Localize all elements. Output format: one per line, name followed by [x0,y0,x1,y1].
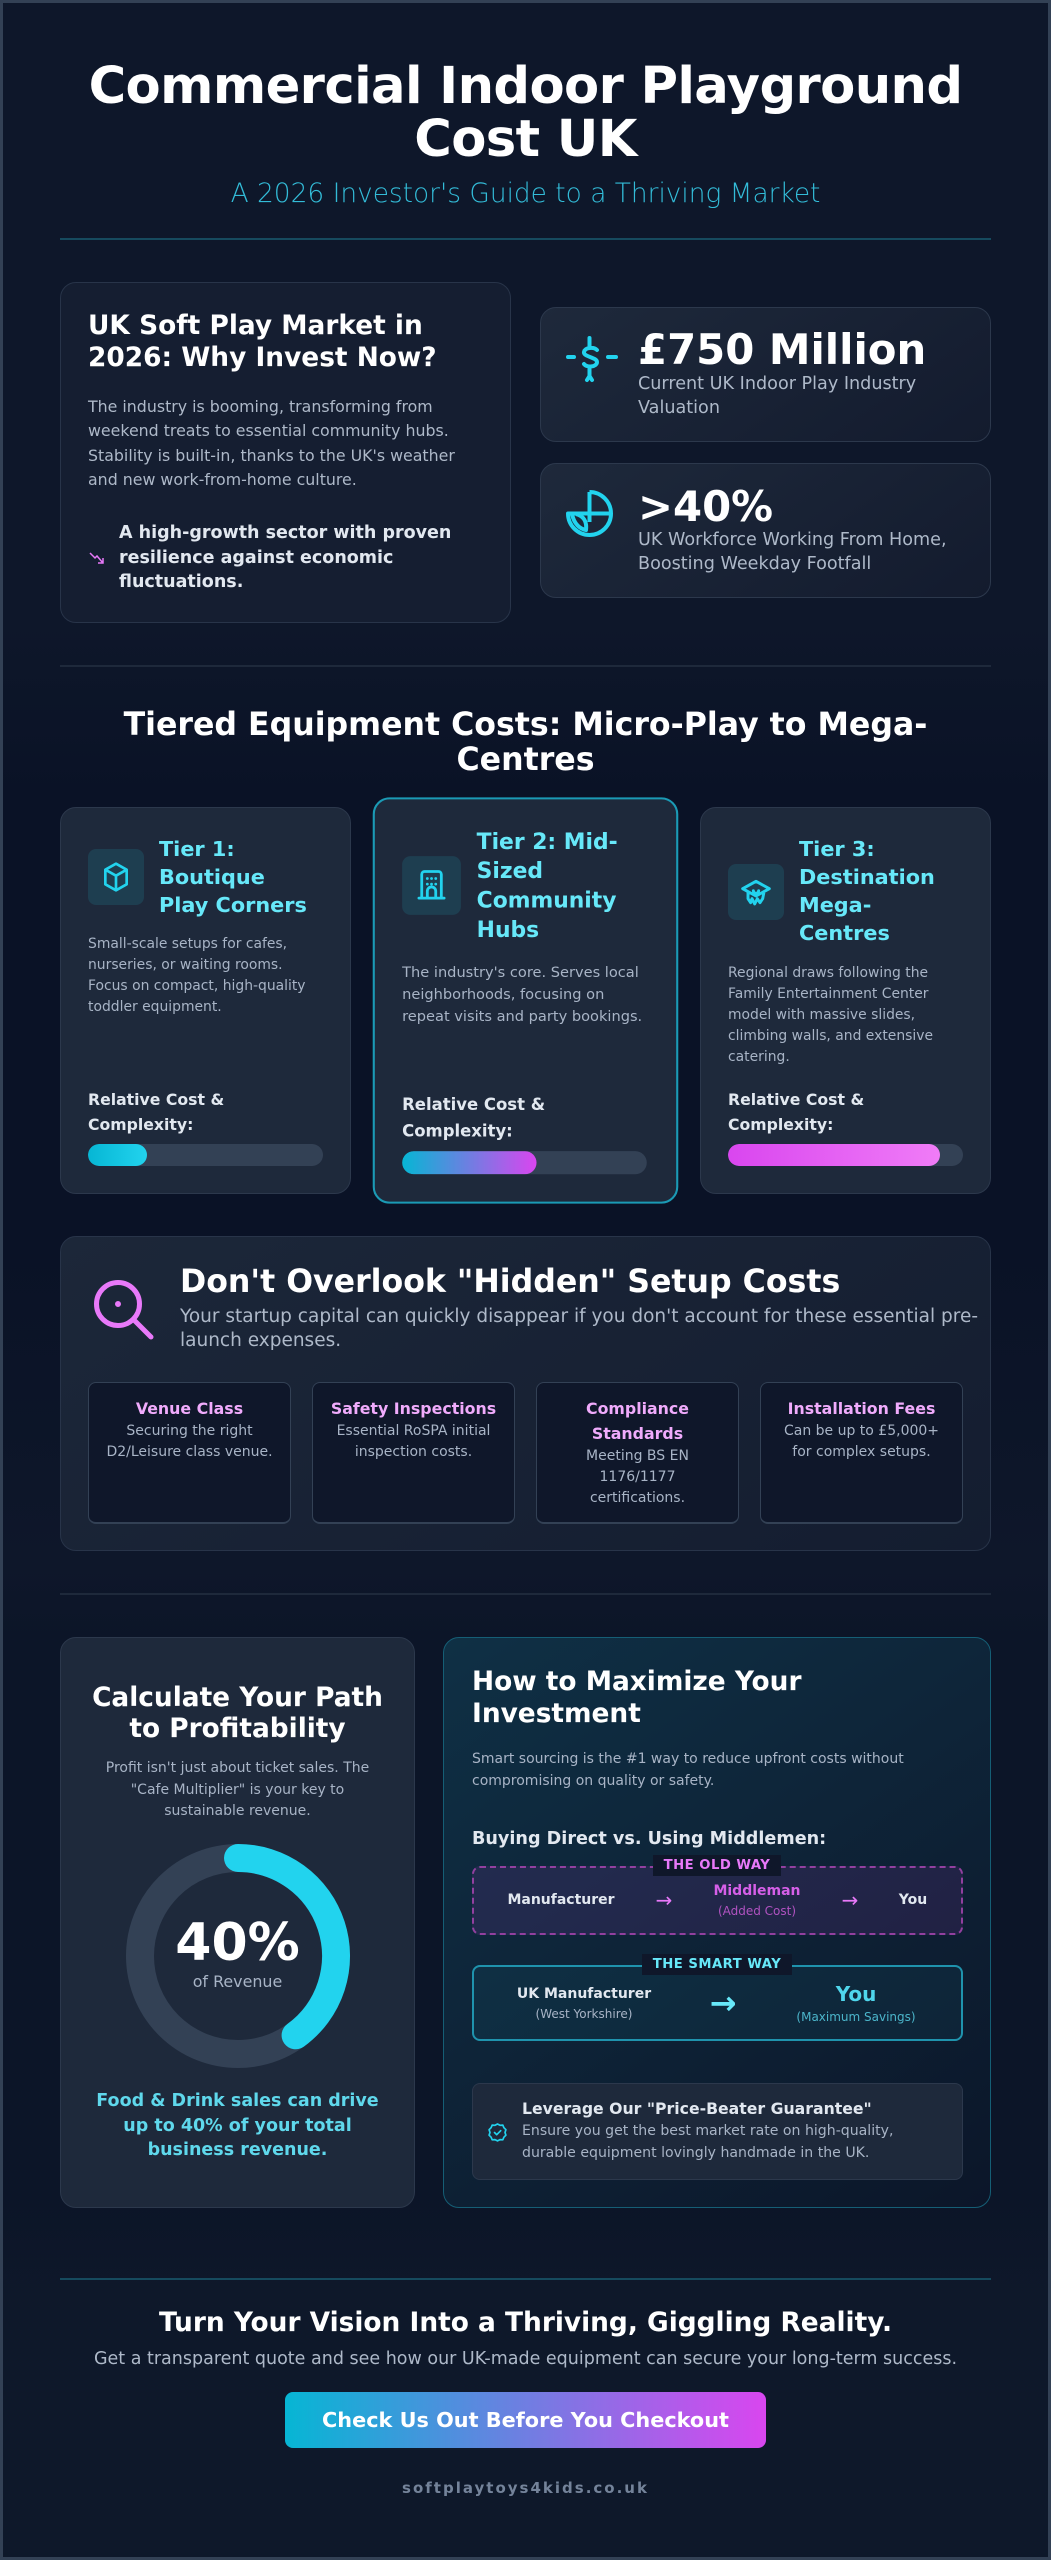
tier description: climbing walls, and extensive [728,1028,933,1044]
icon: check badge [488,2123,507,2142]
card text: D2/Leisure class venue. [106,1444,273,1460]
title: Commercial Indoor Playground [89,56,962,116]
text: market description: weekend treats to essential community hubs. [88,421,449,440]
text: smart sourcing: Smart sourcing is the #1 way to reduce upfront costs without [472,1751,904,1767]
card: venue class [88,1382,291,1524]
text: smart sourcing [472,1751,904,1788]
heading: maximize: How to Maximize Your [472,1666,801,1697]
text: cafe multiplier: Profit isn't just about ticket sales. The [106,1760,369,1776]
heading: profitability: to Profitability [129,1713,346,1744]
tier title: Community [477,888,616,913]
smart way label: THE SMART WAY [653,1957,781,1972]
stat label: valuation: Current UK Indoor Play Industry [638,374,916,394]
heading: tiered equipment costs: Tiered Equipment Costs: Micro-Play to Mega- [124,707,927,743]
icon: magnifier [94,1280,154,1340]
diagram: old way [472,1866,963,1935]
callout: food and drink: business revenue. [148,2140,327,2160]
tier title: Centres [799,921,890,945]
text: cafe multiplier: sustainable revenue. [164,1803,311,1819]
tier description [402,964,642,1025]
icon: box [88,849,144,905]
icon: dollar sign [566,336,618,382]
tier title: Hubs [477,917,539,942]
tier title [159,837,307,917]
tier title: Tier 1: [159,837,235,861]
arrow: → [656,1888,672,1912]
tier description [88,936,306,1015]
panel: hidden setup costs [60,1236,991,1551]
text: market description: Stability is built-in, thanks to the UK's weather [88,446,455,465]
footer heading: Turn Your Vision Into a Thriving, Giggling Reality. [159,2307,892,2338]
text: intro: launch expenses. [180,1330,341,1351]
node: you: You [899,1892,927,1908]
heading: maximize: Investment [472,1698,641,1729]
button [285,2392,766,2448]
card text [784,1423,939,1460]
cost label [728,1090,864,1134]
heading: profitability: Calculate Your Path [92,1682,383,1713]
cost bar [402,1151,647,1174]
card title: Venue Class [136,1399,243,1418]
card title: Installation Fees [788,1399,935,1418]
card text: Can be up to £5,000+ [784,1423,939,1439]
node: manufacturer: Manufacturer [507,1892,615,1908]
card text: for complex setups. [792,1444,931,1460]
tier description: The industry's core. Serves local [402,964,639,981]
tier title: Destination [799,865,935,889]
stat label: workforce: Boosting Weekday Footfall [638,554,871,574]
cost bar [728,1144,963,1166]
node: uk manufacturer: UK Manufacturer [517,1986,651,2002]
tier description: Family Entertainment Center [728,986,929,1002]
footer call to action [60,2278,991,2497]
card text [106,1423,273,1460]
heading: tiered equipment costs [124,707,927,778]
cost label: Relative Cost & [728,1090,864,1109]
cost bar [88,1144,323,1166]
arrow: → [842,1888,858,1912]
callout: high-growth sector: fluctuations. [119,572,243,592]
tier title: Play Corners [159,893,307,917]
card text [586,1448,689,1506]
panel: tier 3 [700,807,991,1194]
chart: 40 percent donut [126,1844,350,2068]
icon: graduation cap [728,864,784,920]
donut value: 40% [175,1913,300,1973]
heading: why invest now: 2026: Why Invest Now? [88,342,437,373]
old way label: THE OLD WAY [664,1858,770,1873]
cost label [402,1094,545,1140]
website: softplaytoys4kids.co.uk [402,2479,649,2497]
tier description: catering. [728,1049,790,1065]
text: market description: and new work-from-home culture. [88,470,357,489]
node: you: You [836,1982,876,2006]
panel: market overview [60,282,511,623]
tier description: neighborhoods, focusing on [402,986,604,1003]
callout: food and drink: Food & Drink sales can drive [96,2091,379,2111]
cost label [88,1090,224,1134]
title: Cost UK [414,109,637,169]
icon: pie and leaf [566,490,613,537]
stat label: valuation: Valuation [638,398,720,418]
heading: maximize [472,1666,802,1729]
arrow: → [710,1984,736,2022]
panel: work from home stat [540,463,991,598]
heading: profitability [92,1682,383,1744]
old way label [653,1855,781,1876]
cost label: Complexity: [88,1114,193,1134]
card: safety inspections [312,1382,515,1524]
card title: Safety Inspections [331,1399,496,1418]
card text [337,1423,490,1460]
card text: Securing the right [126,1423,253,1439]
tier title: Mega- [799,893,871,917]
tier description: toddler equipment. [88,999,222,1015]
panel: path to profitability [60,1637,415,2208]
button: Check Us Out Before You Checkout [322,2408,729,2432]
tier title [476,829,618,942]
panel: tier 2 [373,797,678,1204]
stat: 750 million: £750 Million [638,325,926,374]
stat: over 40 percent: >40% [638,482,773,531]
manufacturer note: (West Yorkshire) [536,2007,632,2021]
tier title: Sized [477,858,543,883]
cost label: Complexity: [402,1120,513,1140]
tier title: Tier 3: [799,837,875,861]
tier description: repeat visits and party bookings. [402,1008,642,1025]
savings note: (Maximum Savings) [796,2010,916,2024]
guarantee title: Leverage Our "Price-Beater Guarantee" [522,2099,872,2118]
stat label: valuation [638,374,916,418]
cost label: Relative Cost & [402,1094,545,1114]
callout: food and drink [96,2091,379,2160]
cost label: Complexity: [728,1114,833,1134]
card title: Compliance [586,1399,689,1418]
tier description: Focus on compact, high-quality [88,978,306,994]
tier title: Boutique [159,865,265,889]
card text: 1176/1177 [600,1469,675,1485]
smart way label [642,1954,792,1975]
panel: maximize investment [443,1637,991,2208]
callout: high-growth sector: A high-growth sector with proven [119,523,451,543]
node: middleman: Middleman [713,1883,801,1899]
guarantee text: durable equipment lovingly handmade in the UK. [522,2144,869,2160]
card: compliance standards [536,1382,739,1524]
text: intro [180,1306,978,1351]
icon: building [402,856,461,915]
icon: trend arrow [90,552,104,564]
callout: high-growth sector: resilience against economic [119,548,393,568]
subheading: buying direct: Buying Direct vs. Using Middlemen: [472,1829,826,1849]
panel: tier 1 [60,807,351,1194]
middleman note: (Added Cost) [718,1904,796,1918]
card text: inspection costs. [355,1444,472,1460]
heading: tiered equipment costs: Centres [456,742,595,778]
footer text: Get a transparent quote and see how our UK-made equipment can secure your long-term success. [94,2349,957,2369]
card: installation fees [760,1382,963,1524]
heading: hidden costs: Don't Overlook "Hidden" Setup Costs [180,1264,840,1300]
text: market description [88,397,455,489]
tier description: nurseries, or waiting rooms. [88,957,283,973]
guarantee text [522,2123,893,2160]
stat label: workforce: UK Workforce Working From Home, [638,530,947,550]
text: intro: Your startup capital can quickly disappear if you don't account for these essential pre- [180,1306,978,1327]
text: cafe multiplier [106,1760,369,1819]
card text: Meeting BS EN [586,1448,689,1464]
card text: Essential RoSPA initial [337,1423,490,1439]
callout: food and drink: up to 40% of your total [123,2116,352,2136]
card title: Standards [592,1424,683,1442]
text: market description: The industry is booming, transforming from [88,397,433,416]
callout: price-beater guarantee [472,2083,963,2180]
tier title [799,837,935,945]
card text: certifications. [590,1490,685,1506]
card title [586,1399,689,1442]
diagram: smart way [472,1965,963,2041]
donut label: of Revenue [193,1972,282,1991]
tier title: Tier 2: Mid- [477,829,618,854]
heading: why invest now [88,310,437,373]
text: cafe multiplier: "Cafe Multiplier" is your key to [131,1782,344,1798]
stat label: workforce [638,530,947,574]
subtitle: A 2026 Investor's Guide to a Thriving Market [231,178,820,209]
tier description: Regional draws following the [728,965,928,981]
heading: why invest now: UK Soft Play Market in [88,310,423,341]
guarantee text: Ensure you get the best market rate on high-quality, [522,2123,893,2139]
panel: market valuation stat [540,307,991,442]
tier description: model with massive slides, [728,1007,915,1023]
title [89,56,962,169]
cost label: Relative Cost & [88,1090,224,1109]
callout: high-growth sector [119,523,451,592]
text: smart sourcing: compromising on quality or safety. [472,1772,714,1788]
tier description [728,965,933,1065]
tier description: Small-scale setups for cafes, [88,936,287,952]
